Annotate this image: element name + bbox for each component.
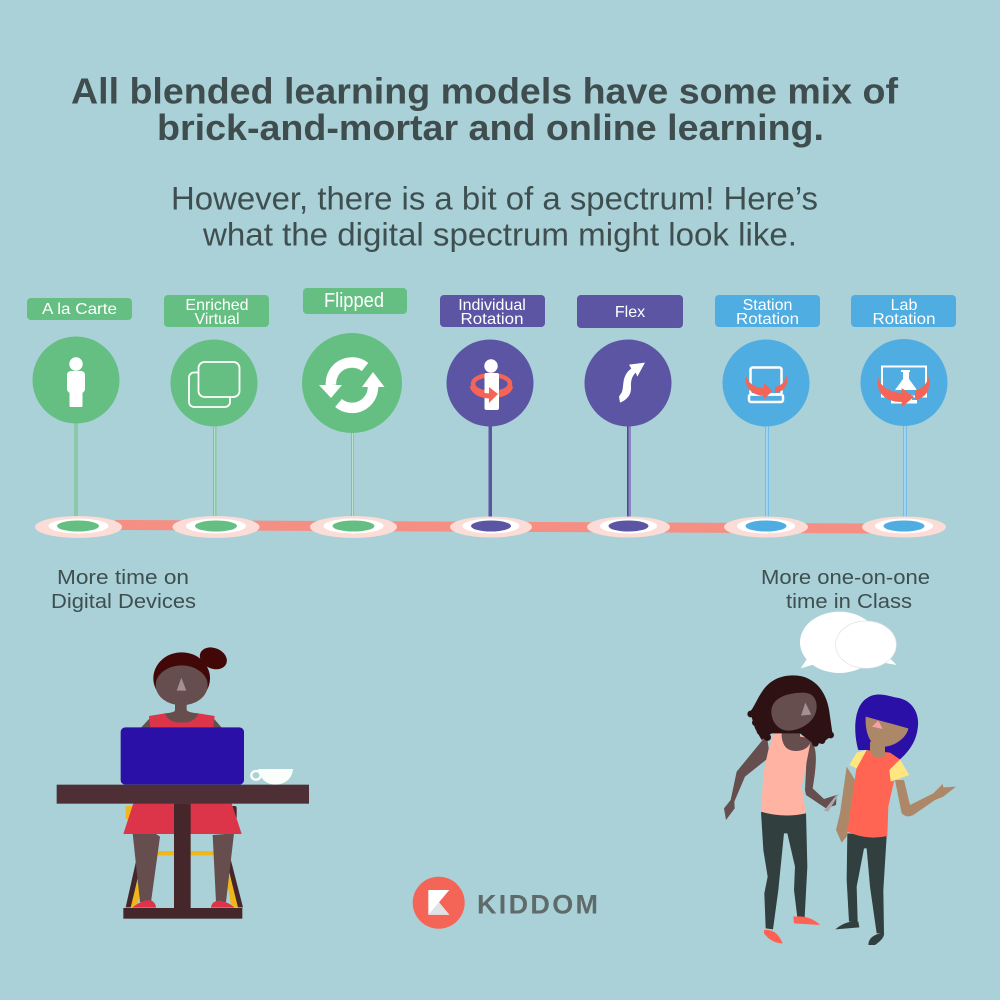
model: A la Carte: A la Carte	[42, 301, 117, 318]
spectrum line	[115, 520, 870, 534]
speech bubbles	[800, 612, 897, 673]
illustration: two people talking	[724, 612, 956, 945]
model: Enriched Virtual	[164, 295, 269, 538]
icon: curved arrow	[619, 363, 645, 403]
subtitle	[171, 180, 818, 252]
model: Flipped: Flipped	[324, 290, 384, 312]
model: Station Rotation	[715, 295, 820, 538]
icon: sync arrows	[319, 362, 384, 408]
title	[71, 70, 899, 148]
model: Flipped	[302, 288, 407, 538]
model: Lab Rotation	[851, 295, 956, 538]
model: Lab Rotation: Lab	[891, 297, 917, 314]
title: All blended learning models have some mix of	[71, 70, 899, 112]
caption: digital devices	[51, 567, 196, 613]
subtitle: what the digital spectrum might look like.	[202, 216, 797, 252]
logo: Kiddom: KIDDOM	[477, 890, 598, 920]
subtitle: However, there is a bit of a spectrum! Here’s	[171, 180, 818, 216]
title: brick-and-mortar and online learning.	[157, 107, 824, 148]
caption: digital devices: More time on	[57, 567, 189, 589]
model: Station Rotation: Station	[743, 297, 792, 314]
right woman	[835, 694, 956, 945]
caption: one-on-one time: time in Class	[786, 591, 912, 613]
illustration: woman at laptop	[57, 644, 309, 919]
caption: digital devices: Digital Devices	[51, 591, 196, 613]
icon: computer with rotation arrow	[746, 368, 787, 402]
icon: person with rotation arrow	[472, 359, 511, 410]
model: A la Carte	[27, 298, 132, 538]
caption: one-on-one time	[761, 567, 930, 613]
model: Lab Rotation: Rotation	[872, 311, 936, 328]
model: Enriched Virtual: Virtual	[194, 311, 240, 328]
caption: one-on-one time: More one-on-one	[761, 567, 930, 589]
model: Enriched Virtual: Enriched	[185, 297, 249, 314]
icon: person	[67, 357, 85, 407]
logo: Kiddom	[413, 877, 598, 929]
model: Flex	[577, 295, 683, 538]
left woman	[724, 675, 839, 943]
model: Individual Rotation: Rotation	[460, 311, 524, 328]
model: Station Rotation: Rotation	[736, 311, 799, 328]
icon: lab screen with rotation arrow	[878, 366, 930, 407]
model: Individual Rotation: Individual	[458, 297, 526, 314]
model: Individual Rotation	[440, 295, 545, 538]
left woman hair	[747, 675, 834, 747]
icon: overlapping windows	[189, 362, 240, 407]
model: Flex: Flex	[615, 304, 645, 321]
logo mark	[428, 890, 449, 915]
